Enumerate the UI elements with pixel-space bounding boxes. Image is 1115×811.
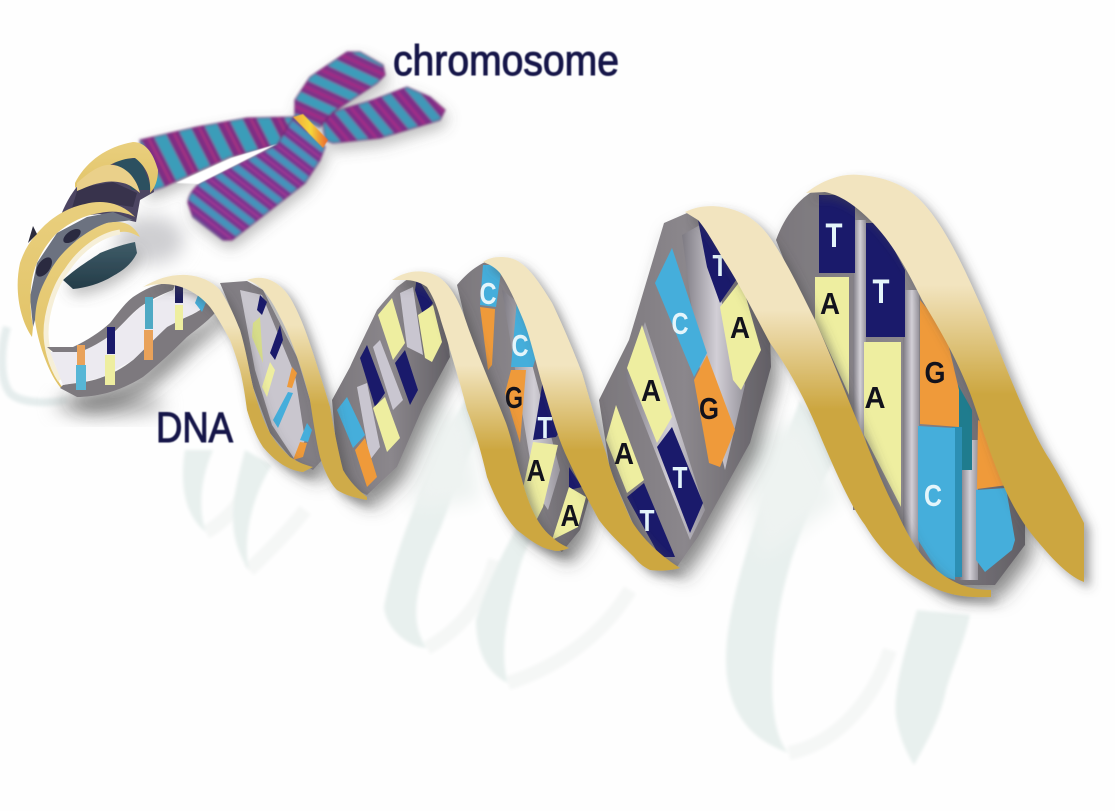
A yellow 2: [864, 342, 901, 507]
front gold ring: [35, 222, 140, 388]
pale interior: [240, 290, 305, 460]
navy base 2: [360, 345, 385, 407]
letter T: T: [640, 503, 655, 538]
pale rod 2: [625, 322, 705, 540]
grey backing: [776, 185, 1025, 585]
letter A: A: [641, 373, 661, 408]
teal side band: [958, 385, 972, 470]
chromosome body: [140, 52, 445, 240]
base pair bar 3: [144, 297, 153, 360]
gold ribbon 0a: [143, 275, 313, 472]
histone disc: [63, 242, 137, 289]
DNA coil around histone: [18, 142, 158, 388]
centromere: [293, 114, 328, 148]
coil ring middle gold: [77, 165, 140, 193]
navy base 3: [395, 350, 418, 405]
G orange base: [505, 370, 526, 443]
chromosome arm: long left: [140, 117, 310, 193]
grey backing: [599, 210, 771, 567]
yellow base 1: [378, 298, 405, 360]
chromosome arm: top: [295, 52, 385, 127]
yellow rung: [262, 362, 275, 397]
letter G: G: [505, 380, 523, 415]
grey backing: [220, 281, 322, 470]
dark blotch on coil: [33, 255, 55, 279]
blue rung lower: [300, 423, 312, 442]
upper grey band: [47, 280, 177, 352]
pale rod: [853, 220, 866, 510]
gold ribbon 2: [483, 257, 680, 571]
gold ribbon 0b: [247, 278, 367, 500]
grey backing: [457, 258, 590, 552]
letter C: C: [672, 306, 688, 341]
letter A: A: [560, 498, 580, 533]
small blue rung: [195, 290, 207, 312]
pale rod: [903, 290, 919, 560]
A yellow low: [606, 405, 644, 493]
orange rear: [977, 420, 1008, 489]
blue rear: [976, 488, 1015, 572]
orange base 1: [480, 307, 495, 370]
blue base: [337, 397, 365, 448]
letter A: A: [730, 310, 750, 345]
pale ribbon shadows: [183, 375, 970, 765]
base pair bar 1: [76, 345, 86, 390]
letter A: A: [864, 380, 886, 415]
grey backing: [332, 275, 450, 495]
T navy low: [627, 483, 675, 557]
yellow base 2: [418, 305, 442, 362]
chromosome: [140, 52, 445, 240]
grey band between coil rings: [30, 212, 133, 327]
DNA rung section between ribbons 0a and 0b: [220, 281, 322, 470]
DNA rung section 2 to 3: [599, 210, 771, 567]
pale rod 3: [357, 383, 380, 460]
letter C: C: [924, 478, 942, 513]
T navy 2: [866, 223, 905, 337]
chromosome arm: right: [323, 87, 445, 143]
A yellow base 2: [552, 487, 586, 540]
A yellow right: [720, 280, 761, 390]
pale rod 1: [400, 287, 423, 355]
orange base: [355, 438, 377, 487]
G orange: [694, 355, 735, 467]
T navy top: [698, 220, 741, 303]
shadow and lower grey band: [60, 293, 220, 397]
T navy mid: [657, 427, 703, 533]
pale rod 2: [373, 340, 403, 410]
pale rod 1: [682, 225, 745, 470]
soft shadow near coil: [116, 216, 184, 264]
letter T: T: [712, 248, 728, 283]
faint connecting arcs: [206, 495, 890, 753]
letter T: T: [672, 460, 688, 495]
orange rung: [287, 367, 297, 388]
teal side band: [952, 427, 962, 577]
C blue: [918, 426, 955, 580]
C blue: [655, 248, 707, 377]
navy base 1: [415, 277, 433, 315]
orange rung lower: [293, 442, 307, 460]
A yellow base 1: [522, 442, 558, 523]
small dark mark: [28, 226, 37, 243]
gap between lower arms: [176, 144, 277, 184]
blue rung: [273, 392, 293, 428]
pale rod: [502, 290, 560, 510]
outer gold ring: [18, 202, 135, 337]
coil dark backing: [60, 158, 154, 222]
navy base lower: [569, 467, 582, 490]
cast shadow of helix on ground: [2, 327, 970, 765]
letter T: T: [826, 217, 843, 255]
pale strip: [50, 290, 205, 385]
G orange: [920, 300, 959, 427]
letter T: T: [538, 410, 553, 445]
base pair bar 4: [175, 282, 183, 330]
dark blotch on coil: [61, 226, 83, 246]
A yellow: [815, 277, 849, 395]
letter A: A: [820, 286, 840, 321]
letter T: T: [872, 273, 890, 311]
cream inner edge of ring: [46, 232, 120, 380]
DNA rung section 3 to 4: [776, 185, 1025, 585]
yellow-green rung: [252, 317, 263, 363]
A yellow mid: [627, 325, 672, 443]
DNA rung section 0b to 1: [332, 275, 450, 495]
gold ribbon 1: [392, 271, 569, 551]
letter G: G: [924, 355, 946, 390]
T navy base: [533, 380, 565, 440]
C blue base 2: [511, 300, 541, 367]
yellow base 3: [373, 397, 400, 452]
T navy: [819, 195, 855, 273]
navy rung top: [257, 295, 267, 315]
letter A: A: [526, 453, 546, 488]
DNA left: flat section: [47, 280, 220, 397]
gold ribbon 3: [685, 206, 991, 597]
soft shadow under flat DNA: [55, 394, 165, 416]
chromosome end inside coil: [112, 158, 152, 190]
coil ring upper gold: [75, 142, 158, 193]
navy rung: [270, 325, 283, 360]
gold ribbon 4 with tail: [806, 175, 1084, 582]
DNA rung section 1 to 2: [457, 258, 590, 552]
label: chromosome: chromosome: [393, 37, 619, 85]
letter A: A: [614, 436, 634, 471]
histone dark band: [72, 182, 137, 208]
chromosome arm: lower: [188, 118, 325, 240]
letter G: G: [699, 391, 719, 426]
base pair bar 2: [105, 327, 115, 385]
letter C: C: [480, 276, 496, 311]
C blue base 1: [480, 265, 502, 307]
pale rod: [960, 440, 978, 580]
pale coil shadow ring: [2, 327, 67, 402]
label: DNA: DNA: [156, 404, 233, 452]
letter C: C: [512, 328, 528, 363]
pale patches between ribbons: [410, 400, 840, 560]
